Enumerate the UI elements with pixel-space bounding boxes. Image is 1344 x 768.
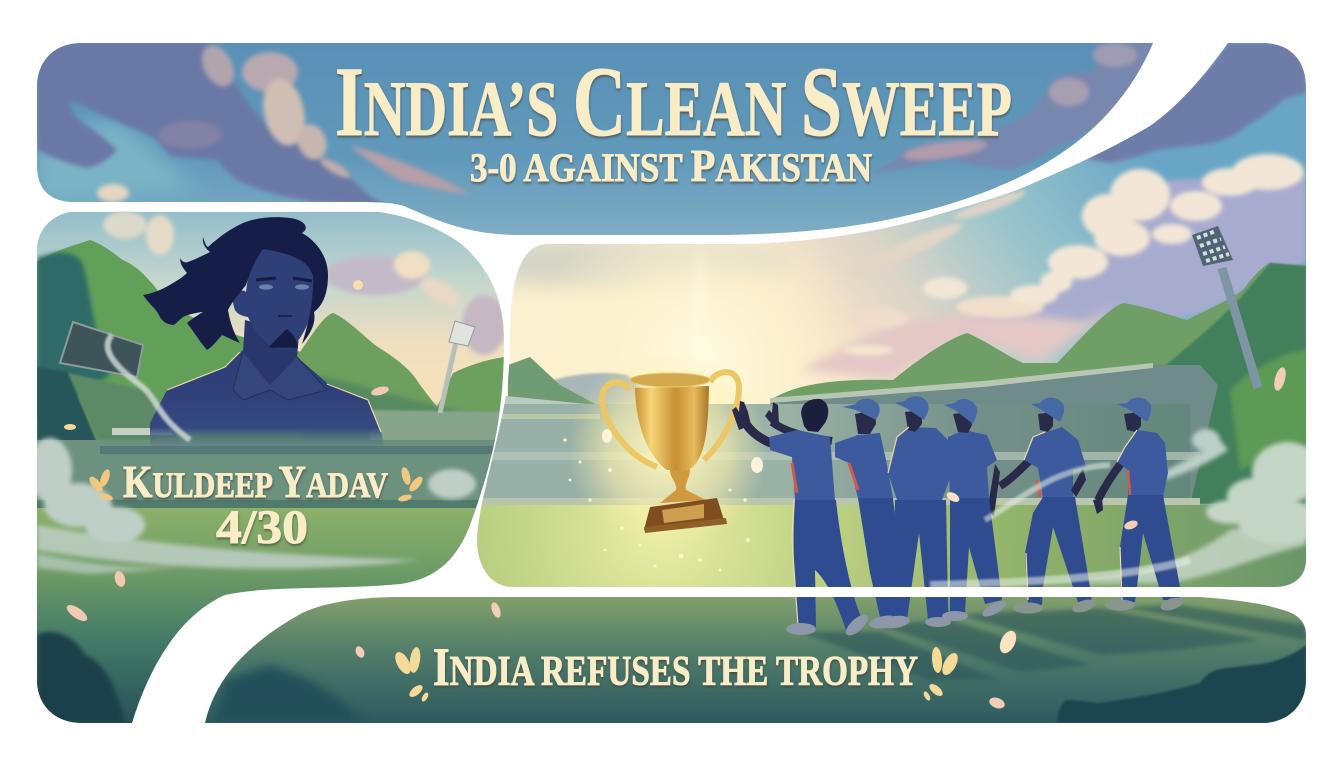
portrait: Kuldeep Yadav bbox=[143, 217, 385, 448]
leaf ornament right of caption bbox=[922, 647, 961, 702]
player 6 bbox=[1093, 398, 1185, 613]
panel: trophy stadium scene bbox=[450, 40, 1324, 595]
light ray bbox=[698, 282, 702, 312]
trophy handles bbox=[602, 382, 657, 467]
stadium band bbox=[37, 440, 507, 506]
subtitle: 3-0 AGAINST PAKISTAN bbox=[470, 140, 872, 191]
trophy cup bbox=[635, 386, 709, 470]
lavender cloud bank bbox=[1024, 174, 1306, 322]
trophy stem bbox=[660, 470, 706, 503]
drifting petals bbox=[354, 366, 1288, 710]
trophy bbox=[602, 372, 739, 533]
scoreboard bbox=[60, 322, 143, 377]
player shadows bbox=[800, 605, 1306, 680]
bush silhouettes bbox=[37, 632, 125, 723]
floodlight bbox=[440, 321, 475, 413]
sparkles near trophy bbox=[563, 429, 763, 571]
label: Kuldeep Yadav 4/30: KULDEEP YADAV bbox=[123, 456, 388, 507]
trophy base bbox=[644, 498, 724, 530]
mist clouds bbox=[28, 438, 476, 574]
pitch bbox=[477, 505, 1306, 587]
title: INDIA’S CLEAN SWEEP bbox=[335, 46, 1012, 157]
facial features bbox=[256, 278, 312, 281]
player 4 bbox=[942, 399, 1008, 621]
cloud highlights top left bbox=[97, 40, 470, 202]
floodlight bbox=[1192, 226, 1258, 388]
mist right bbox=[1048, 426, 1306, 586]
foreground bushes bbox=[1057, 645, 1306, 723]
hills bbox=[508, 263, 1310, 505]
leaf ornament left of name bbox=[89, 469, 113, 500]
player 2 bbox=[765, 399, 912, 631]
shirt bbox=[150, 350, 385, 448]
panel: bottom caption strip bbox=[200, 595, 1310, 725]
player 3 bbox=[879, 396, 954, 630]
stand bbox=[37, 366, 97, 440]
label: Kuldeep Yadav 4/30: 4/30 bbox=[216, 501, 308, 554]
leaf ornament left of caption bbox=[392, 646, 430, 703]
leaf ornament right of name bbox=[398, 467, 423, 502]
trophy glow bbox=[574, 361, 762, 524]
panel: top sky banner bbox=[37, 40, 1157, 238]
cloud mass top left bbox=[37, 43, 387, 206]
muted haze upper left bbox=[514, 244, 783, 294]
hills bbox=[37, 240, 504, 450]
petals in left panel bbox=[64, 280, 390, 624]
player 1 bbox=[732, 399, 871, 639]
clouds behind portrait bbox=[103, 211, 506, 355]
neck bbox=[243, 320, 299, 385]
grandstand bbox=[477, 363, 1218, 506]
players group bbox=[732, 396, 1190, 639]
hair bbox=[143, 217, 328, 350]
smoke swirl bbox=[108, 335, 190, 440]
purple cloud upper right bbox=[1083, 43, 1306, 163]
label: Kuldeep Yadav 4/30 bbox=[123, 466, 390, 547]
field bbox=[37, 508, 507, 728]
bottom caption: India refuses the trophy: INDIA REFUSES THE TROPHY bbox=[433, 637, 918, 697]
face bbox=[233, 248, 313, 350]
panel: Kuldeep Yadav scene bbox=[28, 211, 507, 728]
wind swoosh across players bbox=[930, 465, 1190, 585]
pink low cloud haze bbox=[800, 305, 1123, 378]
player 5 bbox=[1000, 398, 1097, 615]
bright cumulus clouds bbox=[843, 154, 1304, 355]
clouds top right bbox=[870, 43, 1153, 173]
